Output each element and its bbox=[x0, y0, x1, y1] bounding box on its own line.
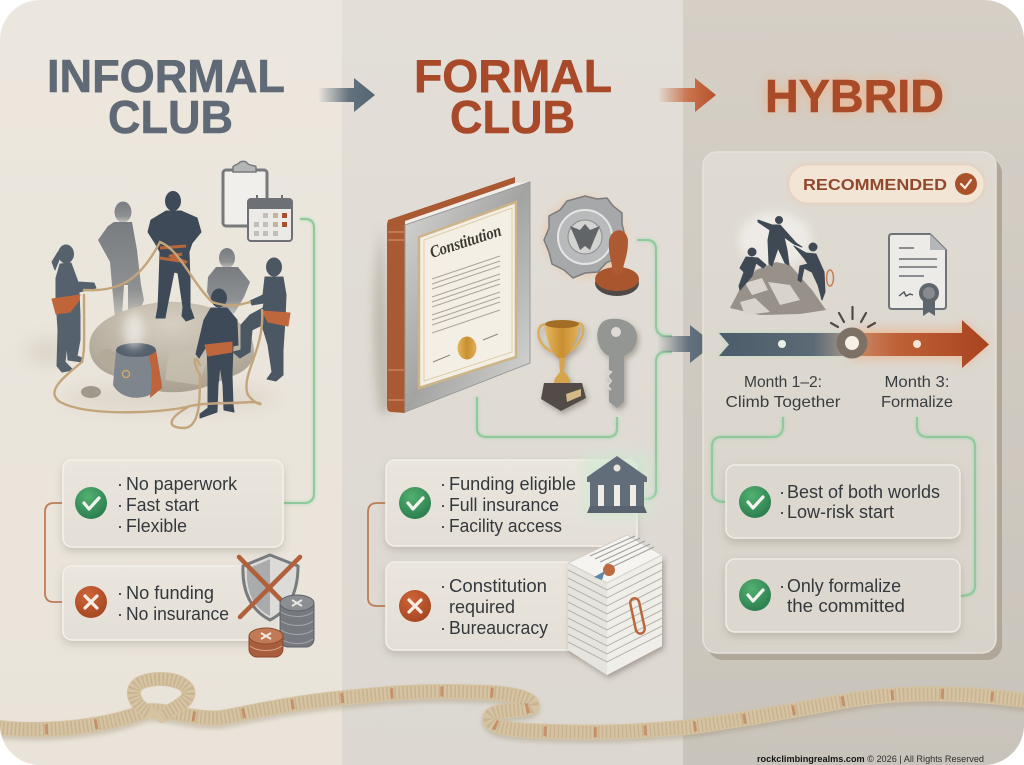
connector: bank to timeline bbox=[640, 352, 672, 499]
card: hybrid benefit two bbox=[726, 559, 960, 632]
title: informal club: CLUB bbox=[108, 91, 233, 143]
icon: red cross bbox=[75, 586, 107, 618]
certificate heading: Constitution bbox=[427, 221, 504, 262]
illustration: informal climbers around boulder bbox=[26, 192, 290, 428]
benefit text: Low-risk start bbox=[787, 502, 894, 522]
connector: informal green bbox=[283, 219, 314, 503]
icon: crossed shield and coins bbox=[239, 555, 314, 657]
rope loop bbox=[134, 679, 189, 716]
benefit text: the committed bbox=[787, 596, 905, 616]
label: climb together: Climb Together bbox=[726, 394, 841, 411]
icon: red cross bbox=[399, 590, 431, 622]
label: month 3: Month 3: bbox=[884, 374, 950, 391]
benefit text: · bbox=[779, 502, 785, 522]
connector: month 3 to card bbox=[917, 417, 975, 596]
arrow: informal to formal bbox=[318, 78, 375, 112]
icon: green check bbox=[739, 579, 771, 611]
panel: hybrid recommended bbox=[703, 152, 1002, 660]
certificate page bbox=[419, 202, 516, 388]
silver frame bbox=[405, 182, 530, 412]
cons text: · bbox=[117, 604, 123, 624]
connector: book to key bbox=[477, 397, 617, 437]
label: formalize: Formalize bbox=[881, 394, 953, 411]
connector: formal orange bbox=[368, 503, 386, 606]
badge: recommended: RECOMMENDED bbox=[803, 177, 947, 194]
pros text: · bbox=[117, 516, 123, 536]
pros text: Full insurance bbox=[449, 495, 559, 515]
cons text: Constitution bbox=[449, 576, 547, 596]
front climber bbox=[196, 289, 238, 418]
right climber bbox=[233, 258, 290, 381]
boulder bbox=[81, 302, 254, 398]
title: informal club bbox=[50, 59, 284, 134]
pros text: · bbox=[440, 495, 446, 515]
certificate body lines bbox=[432, 256, 500, 333]
connector: month 1-2 to card bbox=[712, 417, 783, 502]
cons text: · bbox=[440, 576, 446, 596]
icon: clipboard and calendar bbox=[223, 161, 292, 241]
pros text: Flexible bbox=[126, 516, 187, 536]
milestone marker bbox=[831, 307, 875, 358]
cons text: No funding bbox=[126, 583, 214, 603]
pros text: Funding eligible bbox=[449, 474, 576, 494]
icon: key bbox=[597, 319, 637, 408]
icon: climbers summit bbox=[730, 212, 834, 315]
pros text: · bbox=[117, 495, 123, 515]
footer credit: rockclimbingrealms.com © 2026 | All Rights Reserved bbox=[757, 754, 984, 764]
title: hybrid: HYBRID bbox=[765, 70, 944, 122]
icon: paper stack with carabiner bbox=[568, 535, 662, 675]
title: informal club: INFORMAL bbox=[47, 50, 285, 102]
icon: signed certificate document bbox=[889, 234, 946, 316]
left woman climber bbox=[52, 245, 96, 372]
back man silhouette bbox=[207, 248, 250, 314]
back woman silhouette bbox=[98, 202, 144, 318]
central standing climber bbox=[148, 192, 201, 321]
card: informal pros bbox=[63, 460, 283, 547]
card: hybrid benefit one bbox=[726, 465, 960, 538]
pros text: No paperwork bbox=[126, 474, 238, 494]
cons text: · bbox=[440, 618, 446, 638]
timeline arrow bbox=[718, 307, 989, 368]
arrow: formal to hybrid bbox=[658, 78, 716, 112]
pros text: · bbox=[440, 516, 446, 536]
label: month 1-2: Month 1–2: bbox=[744, 374, 822, 391]
icon: bank building bbox=[583, 452, 651, 518]
illustration: constitution book bbox=[374, 177, 530, 415]
benefit text: · bbox=[779, 576, 785, 596]
title: formal club bbox=[416, 59, 611, 134]
pros text: · bbox=[440, 474, 446, 494]
cons text: Bureaucracy bbox=[449, 618, 548, 638]
icon: green check bbox=[399, 487, 431, 519]
climbing rope on ground bbox=[54, 242, 262, 428]
icon: trophy bbox=[538, 320, 586, 411]
card: informal cons bbox=[63, 566, 279, 640]
icon: official seal and stamp bbox=[544, 196, 639, 296]
connector: seal to timeline bbox=[637, 240, 672, 336]
chalk bag bbox=[113, 312, 162, 398]
benefit text: · bbox=[779, 482, 785, 502]
pros text: · bbox=[117, 474, 123, 494]
pros text: Fast start bbox=[126, 495, 199, 515]
cons text: · bbox=[117, 583, 123, 603]
title: formal club: CLUB bbox=[450, 91, 575, 143]
icon: green check bbox=[75, 487, 107, 519]
icon: green check bbox=[739, 486, 771, 518]
card: formal cons bbox=[386, 562, 626, 650]
pros text: Facility access bbox=[449, 516, 562, 536]
title: formal club: FORMAL bbox=[414, 50, 612, 102]
badge: recommended bbox=[790, 166, 983, 202]
cons text: No insurance bbox=[126, 604, 229, 624]
arrow: formal to timeline bbox=[657, 325, 714, 363]
connector: informal orange bbox=[45, 503, 62, 602]
benefit text: Best of both worlds bbox=[787, 482, 940, 502]
benefit text: Only formalize bbox=[787, 576, 901, 596]
decorative climbing rope bbox=[0, 679, 1024, 735]
cons text: required bbox=[449, 597, 515, 617]
card: formal pros bbox=[386, 460, 637, 546]
wax seal on certificate bbox=[458, 336, 476, 360]
